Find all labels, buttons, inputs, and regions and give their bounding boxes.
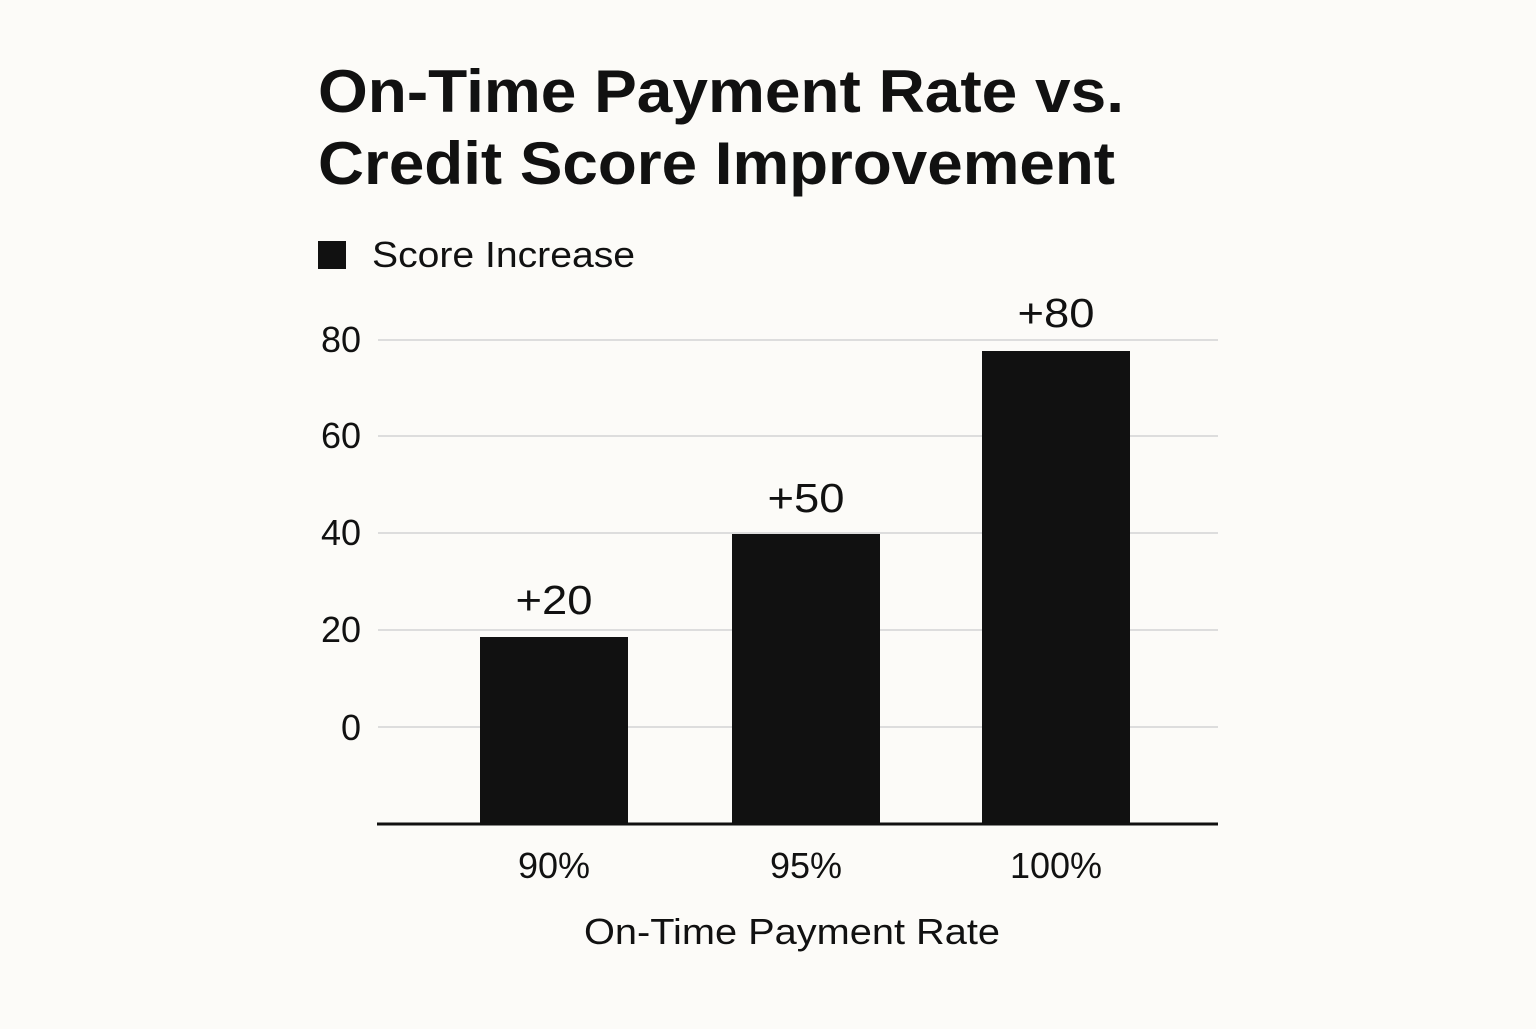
y axis labels: 60 (321, 415, 361, 456)
x axis title: On-Time Payment Rate (584, 911, 1000, 952)
y axis labels: 80 (321, 319, 361, 360)
x axis labels (518, 845, 1102, 886)
value labels: +80 (1018, 290, 1094, 336)
value labels: +50 (768, 475, 844, 521)
y axis labels: 40 (321, 512, 361, 553)
bars (480, 351, 1130, 824)
title (318, 58, 1124, 197)
y axis labels (321, 319, 361, 748)
value labels (516, 290, 1094, 623)
title: Credit Score Improvement (318, 130, 1115, 197)
bar chart (321, 290, 1218, 952)
y axis labels: 0 (341, 707, 361, 748)
y axis labels: 20 (321, 609, 361, 650)
x axis labels: 100% (1010, 845, 1102, 886)
x axis labels: 95% (770, 845, 842, 886)
legend: Score Increase (372, 234, 635, 275)
x axis labels: 90% (518, 845, 590, 886)
title: On-Time Payment Rate vs. (318, 58, 1124, 125)
value labels: +20 (516, 577, 592, 623)
